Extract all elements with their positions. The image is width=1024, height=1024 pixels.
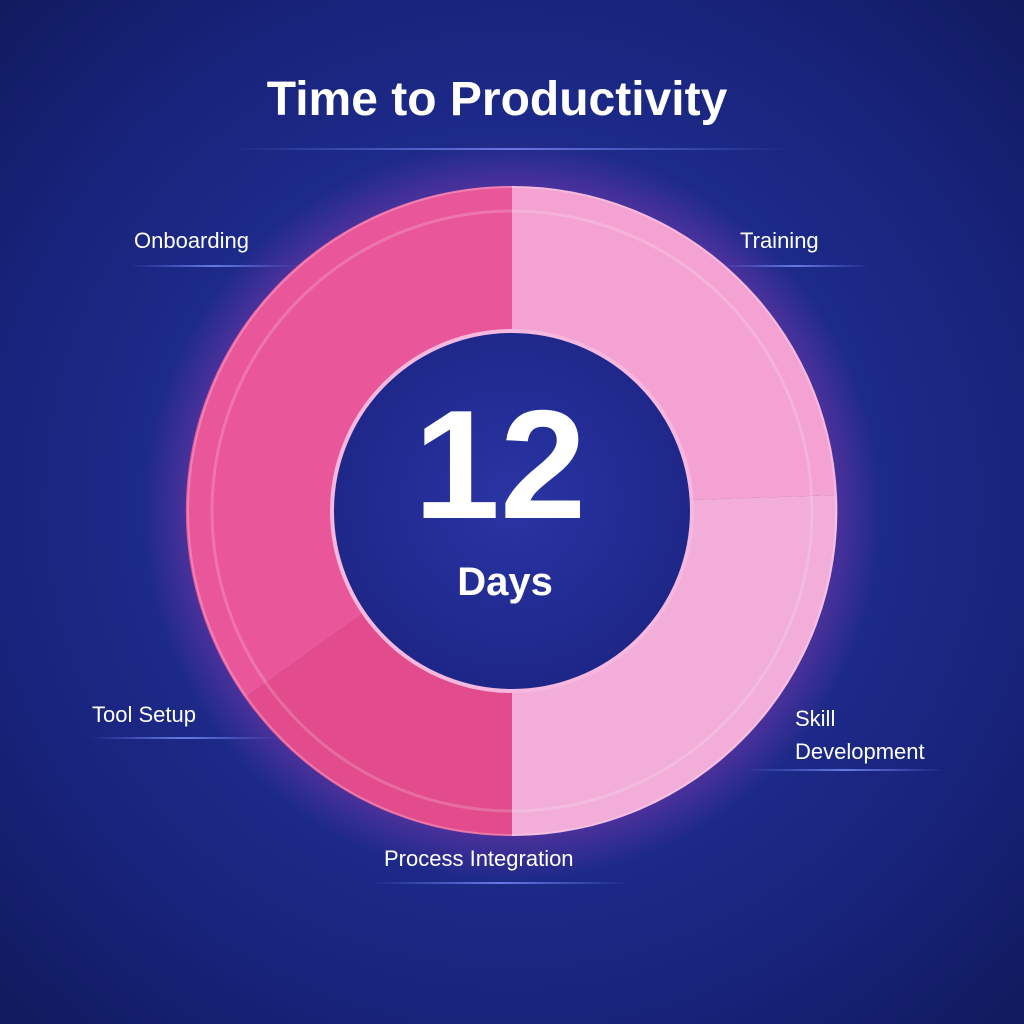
label: tool setup: Tool Setup [92, 702, 196, 727]
label: skill development: Skill [795, 706, 835, 731]
label: training: Training [740, 228, 819, 253]
segment: training [512, 186, 837, 500]
segment: skill development [512, 495, 837, 836]
label: process integration: Process Integration [384, 846, 574, 871]
label: skill development: Development [795, 739, 925, 764]
title: Time to Productivity [267, 73, 727, 126]
segment: onboarding [186, 186, 512, 698]
segment: tool setup / process [245, 612, 512, 836]
label: skill development [795, 706, 925, 764]
label: onboarding: Onboarding [134, 228, 249, 253]
center value: Days [457, 560, 553, 604]
center value: 12 [414, 378, 586, 551]
